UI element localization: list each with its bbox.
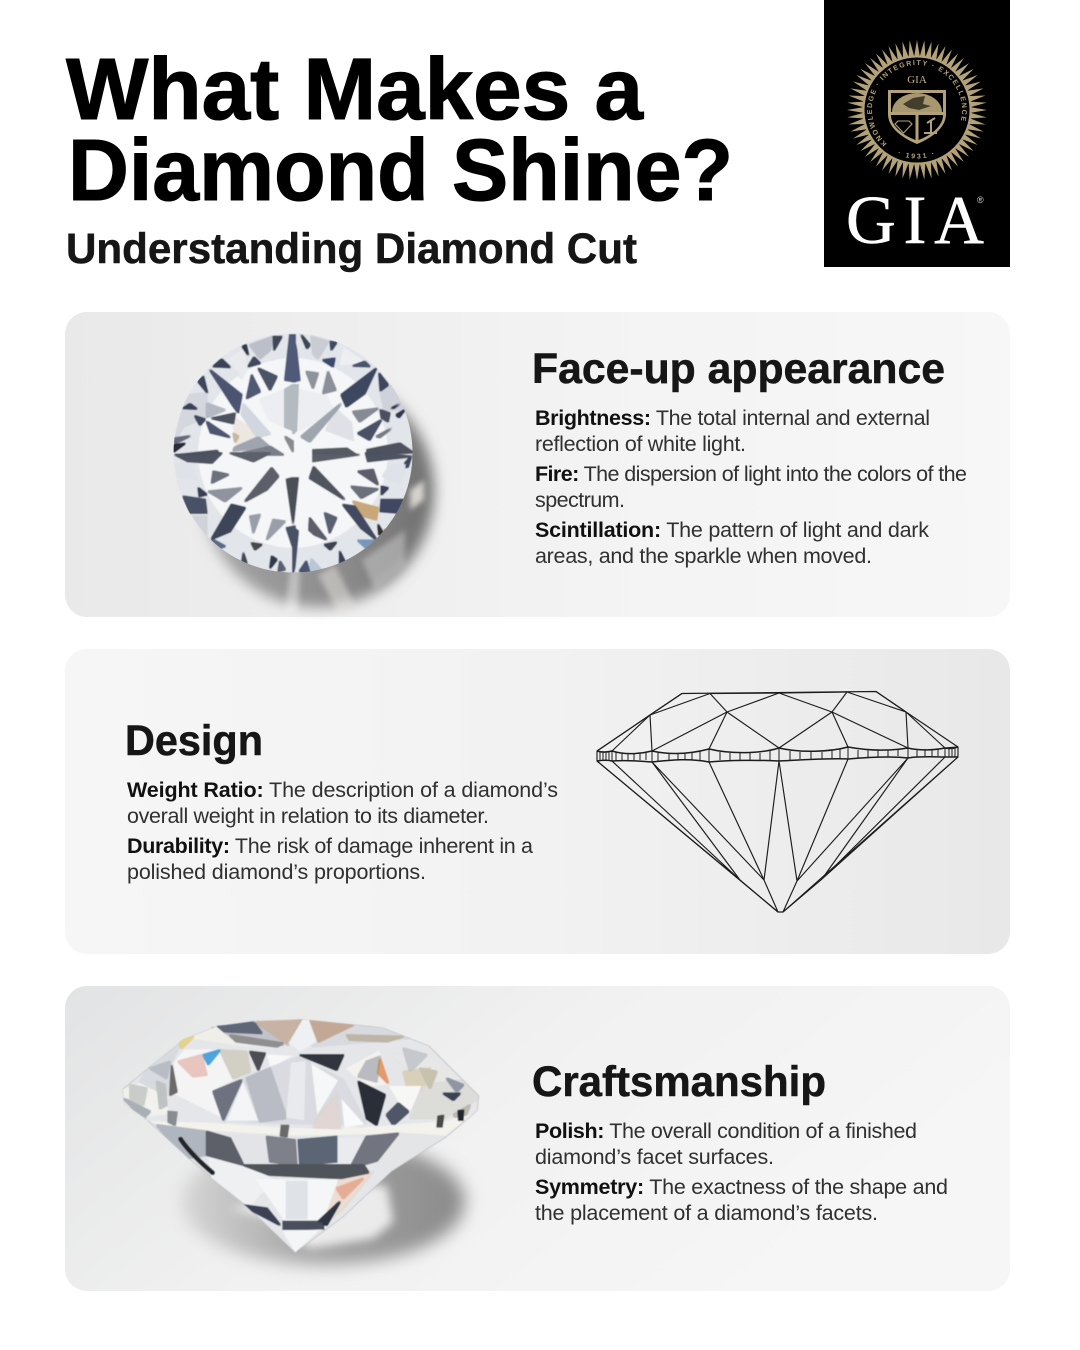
text: symmetry: Symmetry: The exactness of the shape and (535, 1175, 948, 1199)
text: brightness: Brightness: The total internal and external (535, 406, 930, 430)
heading: face-up appearance: Face-up appearance (532, 346, 945, 393)
text: scintillation: areas, and the sparkle when moved. (535, 544, 872, 568)
heading: design: Design (125, 718, 263, 765)
panel: craftsmanship (65, 986, 1010, 1291)
title: What Makes a (66, 41, 644, 138)
icon: round brilliant diamond face-up (171, 331, 415, 575)
GIA logo (824, 0, 1010, 267)
text: brightness (535, 406, 930, 456)
diagram: diamond side profile line drawing (597, 692, 958, 912)
text: scintillation (535, 518, 929, 568)
text: brightness: reflection of white light. (535, 432, 746, 456)
text: durability: polished diamond’s proportions. (127, 860, 426, 884)
text: symmetry: the placement of a diamond’s facets. (535, 1201, 878, 1225)
text: fire: Fire: The dispersion of light into the colors of the (535, 462, 967, 486)
GIA logo: · 1931 · (898, 152, 934, 159)
GIA logo: ® (977, 195, 984, 205)
panel: design (65, 649, 1010, 954)
panel: face-up appearance (65, 312, 1010, 617)
text: symmetry (535, 1175, 948, 1225)
text: polish: Polish: The overall condition of a finished (535, 1119, 917, 1143)
text: polish: diamond’s facet surfaces. (535, 1145, 774, 1169)
GIA logo: GIA (846, 182, 984, 258)
diamond shadow (182, 1138, 465, 1265)
text: weight ratio: overall weight in relation to its diameter. (127, 804, 489, 828)
text: durability: Durability: The risk of damage inherent in a (127, 834, 533, 858)
text: polish (535, 1119, 917, 1169)
text: weight ratio: Weight Ratio: The description of a diamond’s (127, 778, 558, 802)
GIA logo: GIA (907, 74, 927, 86)
title: Diamond Shine? (68, 122, 733, 219)
text: scintillation: Scintillation: The pattern of light and dark (535, 518, 929, 542)
subtitle: Understanding Diamond Cut (66, 226, 637, 273)
heading: craftsmanship: Craftsmanship (532, 1059, 826, 1106)
diamond shadow (202, 375, 434, 612)
text: fire (535, 462, 967, 512)
text: weight ratio (127, 778, 558, 828)
title (66, 41, 733, 219)
text: durability (127, 834, 533, 884)
icon: diamond side view (122, 1018, 480, 1254)
GIA logo: KNOWLEDGE · INTEGRITY · EXCELLENCE (867, 60, 967, 147)
text: fire: spectrum. (535, 488, 625, 512)
